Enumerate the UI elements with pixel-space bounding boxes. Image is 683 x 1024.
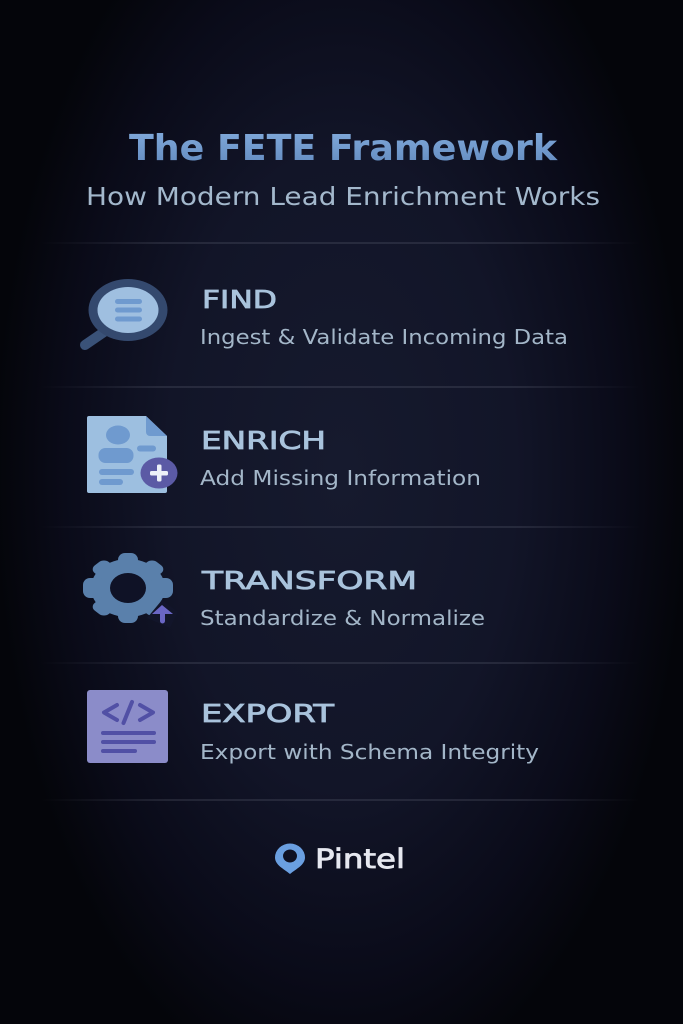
description: export: Export with Schema Integrity — [200, 740, 539, 764]
icon: document with plus — [87, 416, 178, 493]
description: find: Ingest & Validate Incoming Data — [200, 325, 568, 349]
icon: code document — [87, 690, 168, 763]
step: enrich — [87, 416, 481, 493]
icon: location pin — [275, 844, 305, 874]
subtitle: How Modern Lead Enrichment Works — [86, 182, 600, 211]
heading: export: EXPORT — [201, 699, 335, 728]
heading: find: FIND — [202, 285, 277, 314]
step: export — [87, 690, 539, 764]
heading: enrich: ENRICH — [201, 426, 326, 455]
step: transform — [83, 553, 485, 630]
icon: magnifying glass — [85, 279, 168, 345]
logo: Pintel — [275, 844, 405, 875]
step: find — [85, 279, 568, 349]
wordmark: Pintel — [315, 844, 405, 875]
heading: transform: TRANSFORM — [201, 566, 417, 595]
title: The FETE Framework — [129, 128, 558, 169]
description: transform: Standardize & Normalize — [200, 606, 485, 630]
icon: gear with arrow — [83, 553, 178, 628]
description: enrich: Add Missing Information — [200, 466, 481, 490]
